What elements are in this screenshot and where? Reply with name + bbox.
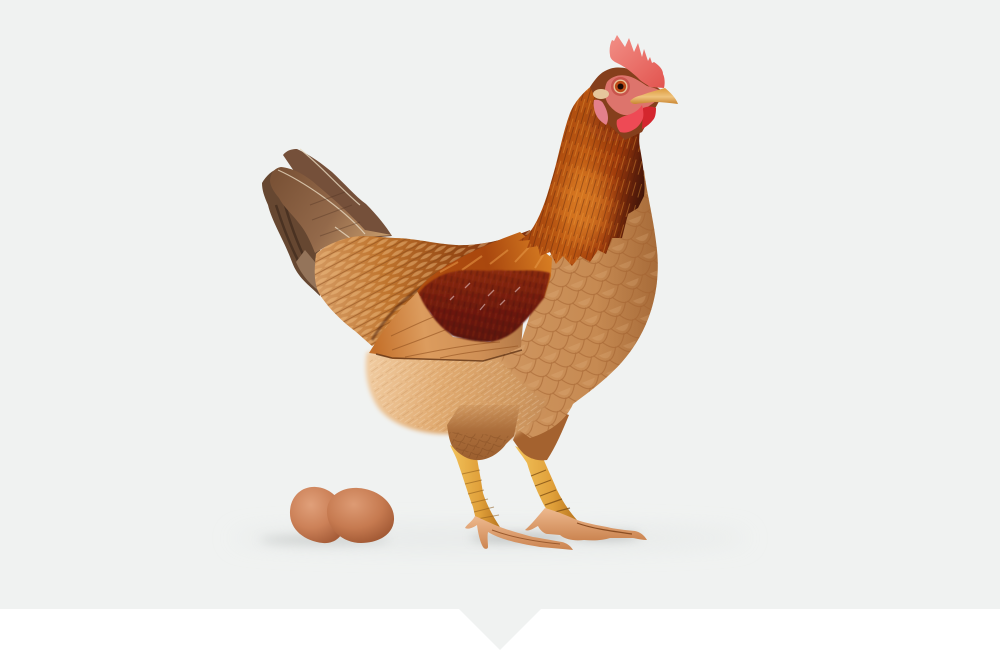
neck hackle feathers <box>518 84 645 266</box>
wing: dark red patch <box>419 270 550 342</box>
tail feathers <box>262 149 392 296</box>
thigh: right <box>513 400 569 460</box>
tail: main feather <box>270 167 392 253</box>
tail: under feathers <box>262 168 320 296</box>
leg: right <box>515 446 647 540</box>
head: face skin <box>605 75 664 115</box>
wattle: left <box>617 105 643 133</box>
chest and breast feathers <box>480 170 658 438</box>
head: ear patch <box>593 89 609 99</box>
wing: flight feathers <box>369 290 523 361</box>
comb <box>610 35 665 88</box>
saddle feathers <box>315 230 540 346</box>
eggs <box>290 487 394 543</box>
icon: eye <box>611 77 630 96</box>
egg: left <box>290 487 345 543</box>
wing <box>369 232 552 361</box>
legs and feet <box>450 445 647 550</box>
head: ear lobe <box>594 100 608 125</box>
wattle: right <box>642 106 656 129</box>
leg: left <box>450 445 573 550</box>
beak <box>630 88 678 104</box>
thigh: left <box>447 405 520 460</box>
head: crown <box>590 68 664 140</box>
tail: rear feather <box>283 149 392 240</box>
egg: right <box>327 488 394 543</box>
head <box>590 35 678 140</box>
fluffy belly <box>366 352 548 438</box>
wing: upper coverts <box>417 232 552 300</box>
ground shadow <box>230 528 750 548</box>
